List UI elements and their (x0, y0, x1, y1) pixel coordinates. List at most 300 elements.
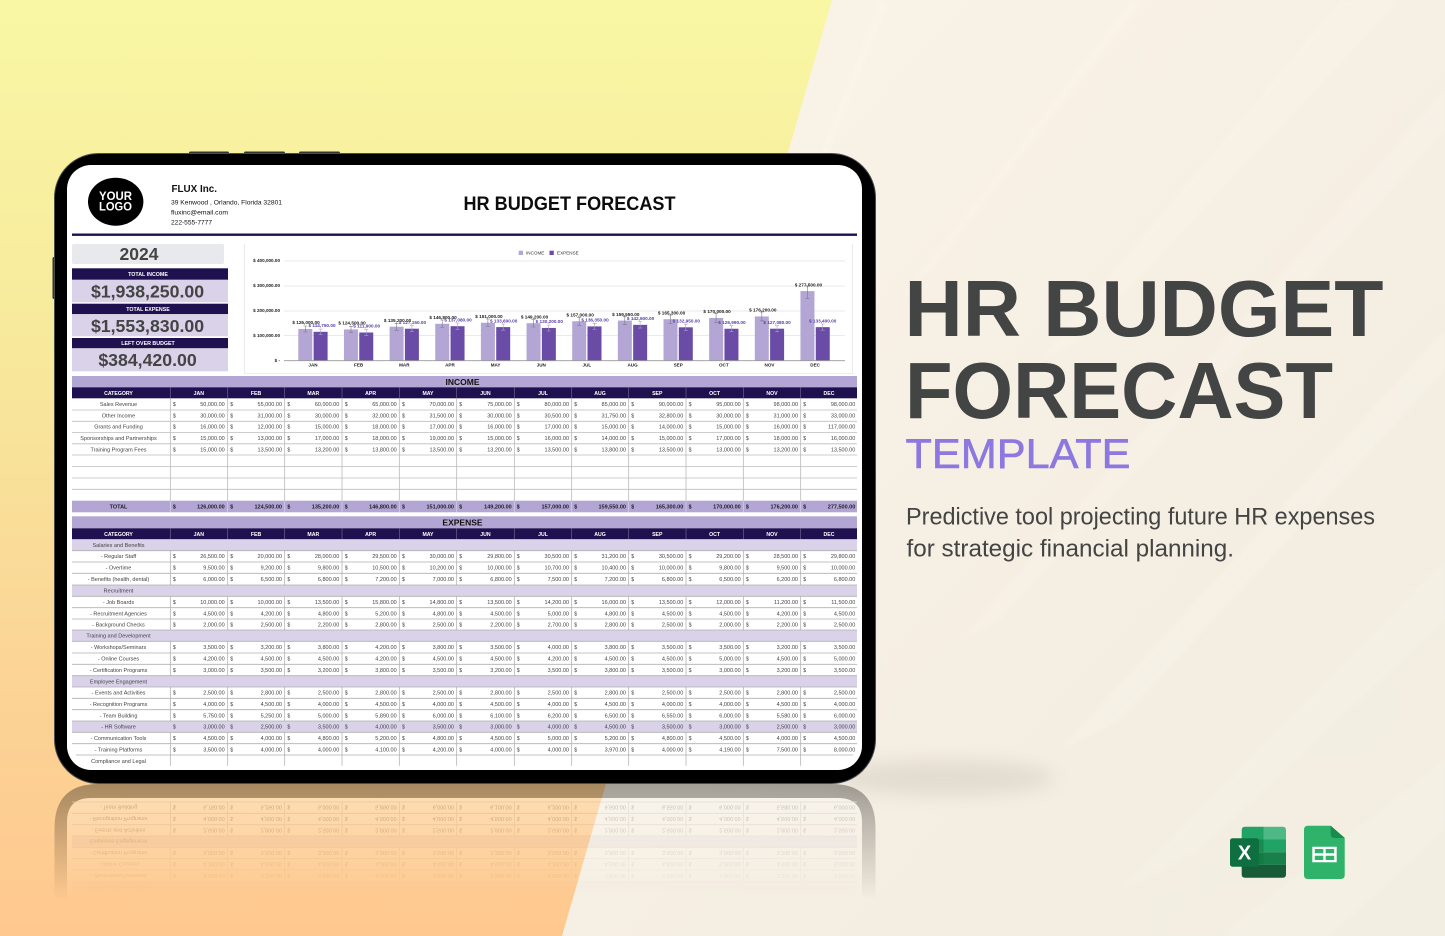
row: sales revenue: 55,000.00 (258, 402, 282, 408)
row: certification programs: 3,800.00 (375, 668, 397, 674)
month labels: SEP (674, 362, 683, 368)
row: overtime: 10,700.00 (545, 566, 569, 572)
row: job boards: 13,500.00 (315, 600, 339, 606)
expense header row: MAY (422, 532, 434, 538)
category: training and development: Training and Development (86, 634, 151, 640)
row: sponsorships and partnerships: 13,000.00 (258, 436, 282, 442)
income total row: 124,500.00 (254, 504, 282, 510)
legend: INCOME (526, 250, 544, 256)
row: sponsorships and partnerships: 15,000.00 (487, 436, 512, 442)
row: sponsorships and partnerships: 17,000.00 (716, 436, 741, 442)
row: recognition programs: 4,500.00 (605, 702, 626, 708)
row: benefits: 7,200.00 (605, 577, 626, 583)
row: events and activities: 2,500.00 (719, 691, 741, 697)
row: workshops and seminars: 3,500.00 (719, 645, 741, 651)
income value labels: $ 277,500.00 (795, 283, 822, 288)
row: sponsorships and partnerships: 18,000.00 (372, 436, 397, 442)
row: online courses: 5,000.00 (719, 657, 741, 663)
row: team building: 6,000.00 (433, 713, 454, 719)
month labels: APR (445, 362, 455, 368)
main heading (904, 264, 1384, 435)
row: events and activities: 2,800.00 (261, 691, 282, 697)
y axis labels: $ - (275, 358, 280, 363)
row: other income: 31,500.00 (430, 413, 454, 419)
row: background checks: 2,500.00 (662, 622, 683, 628)
income total row: TOTAL (110, 504, 128, 510)
description text (906, 503, 1375, 563)
row: recruitment agencies: 5,000.00 (548, 611, 569, 617)
row: events and activities: 2,800.00 (490, 691, 512, 697)
income value labels: $ 165,300.00 (658, 310, 686, 315)
income header row: OCT (709, 391, 721, 397)
icon: microsoft excel: X (1238, 842, 1252, 864)
expense header row: JUL (538, 532, 549, 538)
row: overtime: 10,400.00 (602, 566, 626, 572)
row: workshops and seminars: 3,500.00 (834, 645, 855, 651)
income bars (298, 291, 814, 360)
row: recruitment agencies: 4,500.00 (662, 611, 683, 617)
row: sales revenue: $$$$$$$$$$$$ (173, 402, 806, 408)
income value labels: $ 159,550.00 (612, 312, 640, 317)
row: certification programs: 3,500.00 (662, 668, 683, 674)
row: events and activities: 2,500.00 (433, 691, 454, 697)
expense header row: MAR (307, 532, 319, 538)
row: hr software: 3,500.00 (318, 725, 339, 731)
row: certification programs: 3,500.00 (433, 668, 454, 674)
legend (519, 250, 579, 256)
row: communication tools: 4,500.00 (490, 736, 512, 742)
row: workshops and seminars: 3,500.00 (203, 645, 225, 651)
income value labels: $ 124,500.00 (338, 321, 366, 326)
row: benefits: 6,800.00 (834, 577, 855, 583)
row: communication tools: 4,500.00 (203, 736, 225, 742)
expense value labels: $ 136,350.00 (581, 318, 609, 323)
row: benefits: 7,200.00 (375, 577, 397, 583)
row: events and activities: 2,800.00 (777, 691, 798, 697)
left over budget (72, 338, 228, 371)
row: benefits: 6,800.00 (662, 577, 683, 583)
row: overtime: - Overtime (106, 566, 131, 572)
expense header row: AUG (594, 532, 606, 538)
legend: EXPENSE (557, 250, 579, 256)
row: certification programs: 3,200.00 (490, 668, 512, 674)
y axis labels: $ 100,000.00 (253, 333, 280, 338)
row: training platforms: 4,000.00 (490, 747, 512, 753)
row: job boards: 11,200.00 (774, 600, 798, 606)
main heading: HR BUDGET (904, 264, 1384, 353)
row: events and activities: 2,500.00 (548, 691, 569, 697)
row: sponsorships and partnerships: 19,000.00 (430, 436, 454, 442)
row: grants and funding: 16,000.00 (200, 425, 225, 431)
month labels: AUG (627, 362, 638, 368)
expense value labels: $ 137,080.00 (444, 317, 472, 322)
income table (72, 376, 857, 512)
row: recognition programs: 4,500.00 (490, 702, 512, 708)
row: background checks: 2,700.00 (548, 622, 569, 628)
row: benefits: 6,500.00 (719, 577, 741, 583)
year: 2024 (120, 244, 159, 264)
row: recognition programs: 4,500.00 (777, 702, 798, 708)
y axis labels: $ 200,000.00 (253, 308, 280, 313)
subheading: template: TEMPLATE (906, 430, 1130, 477)
row: grants and funding: 117,000.00 (828, 425, 855, 431)
row: recognition programs: 4,000.00 (834, 702, 855, 708)
description text: for strategic financial planning. (906, 536, 1234, 563)
row: hr software: 4,000.00 (375, 725, 397, 731)
row: team building: 5,250.00 (261, 713, 282, 719)
row: online courses: 4,500.00 (490, 657, 512, 663)
row: recognition programs: $$$$$$$$$$$$ (173, 702, 806, 708)
row: training program fees: $$$$$$$$$$$$ (173, 447, 806, 453)
income value labels (292, 283, 822, 326)
company details: fluxinc@email.com (171, 210, 228, 217)
row: training program fees: 13,500.00 (659, 447, 683, 453)
row: training platforms: 4,000.00 (548, 747, 569, 753)
row: team building: $$$$$$$$$$$$ (173, 713, 806, 719)
row: online courses: 4,500.00 (318, 657, 339, 663)
row: regular staff: 26,500.00 (200, 554, 225, 560)
row: sponsorships and partnerships: 18,000.00 (774, 436, 798, 442)
expense value labels: $ 114,750.00 (308, 323, 336, 328)
expense value labels: $ 132,950.00 (673, 318, 700, 324)
expense header row: APR (365, 532, 376, 538)
expense header row: JAN (194, 532, 204, 538)
income value labels: $ 170,000.00 (703, 309, 731, 314)
expense value labels: $ 133,600.00 (490, 318, 518, 323)
row: job boards: 10,000.00 (258, 600, 282, 606)
row: benefits: 7,000.00 (433, 577, 454, 583)
row: training platforms: 3,500.00 (203, 747, 225, 753)
row: events and activities: 2,500.00 (318, 691, 339, 697)
row: overtime: 9,800.00 (318, 566, 339, 572)
row: sponsorships and partnerships: 16,000.00 (831, 436, 855, 442)
row: recruitment agencies: 4,800.00 (318, 611, 339, 617)
row: regular staff: 29,500.00 (372, 554, 397, 560)
expense header row: CATEGORY (104, 532, 133, 538)
row: other income: 30,000.00 (200, 413, 225, 419)
row: online courses: 4,200.00 (375, 657, 397, 663)
row: background checks: 2,000.00 (203, 622, 225, 628)
row: recognition programs: - Recognition Programs (90, 702, 148, 708)
row: benefits: 6,500.00 (261, 577, 282, 583)
row: team building: 6,500.00 (605, 713, 626, 719)
row: benefits: 6,800.00 (490, 577, 512, 583)
row: training platforms: 7,500.00 (777, 747, 798, 753)
row: grants and funding: 12,000.00 (258, 425, 282, 431)
expense table (72, 516, 857, 766)
row: overtime: $$$$$$$$$$$$ (173, 566, 806, 572)
row: training platforms: 4,100.00 (375, 747, 397, 753)
panel: yearly summary (72, 244, 228, 371)
row: benefits: 7,500.00 (548, 577, 569, 583)
row: overtime: 10,500.00 (372, 566, 397, 572)
row: overtime: 9,800.00 (719, 566, 741, 572)
row: other income: 31,750.00 (602, 413, 626, 419)
row: recruitment agencies: 4,800.00 (433, 611, 454, 617)
row: sales revenue: 80,000.00 (545, 402, 569, 408)
income total row: 149,200.00 (484, 504, 512, 510)
expense value labels: $ 142,600.00 (627, 316, 655, 321)
row: regular staff: 30,500.00 (659, 554, 683, 560)
row: training program fees: 13,200.00 (774, 447, 798, 453)
income header row: JUN (480, 391, 491, 397)
row: grants and funding: 15,000.00 (602, 425, 626, 431)
row: recognition programs: 4,000.00 (662, 702, 683, 708)
company details (171, 184, 283, 227)
row: certification programs: 3,500.00 (834, 668, 855, 674)
row: overtime: 10,000.00 (831, 566, 855, 572)
tablet shadow (835, 760, 1055, 796)
row: sponsorships and partnerships: 15,000.00 (200, 436, 225, 442)
income total row: 176,200.00 (770, 504, 798, 510)
icon: your logo: YOUR (99, 191, 133, 203)
income header row: APR (365, 391, 376, 397)
company details: FLUX Inc. (172, 184, 217, 195)
row: background checks: 2,800.00 (375, 622, 397, 628)
row: training program fees: 13,500.00 (545, 447, 569, 453)
row: sponsorships and partnerships: 14,000.00 (602, 436, 626, 442)
row: training platforms: 4,000.00 (662, 747, 683, 753)
row: background checks: 2,500.00 (834, 622, 855, 628)
row: events and activities: 2,500.00 (834, 691, 855, 697)
income total row: 135,200.00 (312, 504, 339, 510)
row: regular staff: 29,200.00 (716, 554, 741, 560)
background: cream diagonal panel (562, 0, 1445, 936)
row: hr software: 3,000.00 (834, 725, 855, 731)
category: compliance and legal: Compliance and Legal (91, 759, 146, 765)
row: certification programs: 3,200.00 (777, 668, 798, 674)
month labels: MAY (491, 362, 500, 368)
row: certification programs: 3,500.00 (261, 668, 282, 674)
row: grants and funding: 17,000.00 (430, 425, 454, 431)
row: background checks: $$$$$$$$$$$$ (173, 622, 806, 628)
row: hr software: 4,500.00 (605, 725, 626, 731)
row: job boards: 10,000.00 (200, 600, 225, 606)
income total row: 165,300.00 (656, 504, 683, 510)
row: training program fees: 13,000.00 (716, 447, 741, 453)
income header row: AUG (594, 391, 606, 397)
row: sales revenue: 70,000.00 (430, 402, 454, 408)
left over budget: $384,420.00 (98, 350, 197, 370)
month labels: FEB (354, 362, 364, 368)
row: training platforms: 4,200.00 (433, 747, 454, 753)
row: sales revenue: 98,000.00 (774, 402, 798, 408)
row: team building: 5,000.00 (318, 713, 339, 719)
month labels: JUN (537, 362, 547, 368)
row: grants and funding: Grants and Funding (94, 425, 143, 431)
row: online courses: $$$$$$$$$$$$ (173, 657, 806, 663)
row: overtime: 9,500.00 (777, 566, 798, 572)
row: team building: 6,000.00 (719, 713, 741, 719)
row: job boards: 14,200.00 (545, 600, 569, 606)
income header row: NOV (766, 391, 778, 397)
income total row: 277,500.00 (828, 504, 855, 510)
row: job boards: 13,500.00 (659, 600, 683, 606)
error bars (303, 286, 825, 335)
row: regular staff: 28,000.00 (315, 554, 339, 560)
income header row: DEC (824, 391, 835, 397)
row: background checks: 2,000.00 (719, 622, 741, 628)
row: regular staff: - Regular Staff (101, 554, 137, 560)
company details: 222-555-7777 (171, 220, 213, 227)
zero axis (284, 360, 845, 362)
row: hr software: 3,000.00 (490, 725, 512, 731)
row: recruitment agencies: 4,200.00 (777, 611, 798, 617)
expense header row: FEB (251, 532, 261, 538)
icon: microsoft excel (1230, 827, 1286, 878)
income section heading (72, 376, 857, 387)
row: job boards: 16,000.00 (602, 600, 626, 606)
row: sponsorships and partnerships: Sponsorships and Partnerships (80, 436, 157, 442)
row: recognition programs: 4,000.00 (548, 702, 569, 708)
row: sponsorships and partnerships: 16,000.00 (545, 436, 569, 442)
total expense: $1,553,830.00 (91, 316, 204, 336)
row: background checks: 2,800.00 (605, 622, 626, 628)
row: communication tools: 4,800.00 (433, 736, 454, 742)
row: online courses: 4,200.00 (203, 657, 225, 663)
row: job boards: 12,000.00 (716, 600, 741, 606)
row: online courses: 4,200.00 (548, 657, 569, 663)
row: recruitment agencies: 4,800.00 (605, 611, 626, 617)
row: team building: 6,550.00 (662, 713, 683, 719)
row: workshops and seminars: 3,200.00 (777, 645, 798, 651)
icon: google sheets (1304, 826, 1345, 879)
income header row (72, 387, 857, 398)
income header row: CATEGORY (104, 391, 133, 397)
income total row: 159,550.00 (598, 504, 626, 510)
total income: TOTAL INCOME (128, 272, 168, 278)
row: online courses: 4,500.00 (777, 657, 798, 663)
row: recognition programs: 4,000.00 (433, 702, 454, 708)
income total row: 151,000.00 (426, 504, 454, 510)
row: background checks: 2,200.00 (777, 622, 798, 628)
main heading: FORECAST (905, 346, 1333, 435)
row: hr software: - HR Software (101, 725, 136, 731)
row: recruitment agencies: 4,200.00 (261, 611, 282, 617)
row: training platforms: $$$$$$$$$$$$ (173, 747, 806, 753)
row: training program fees: 13,200.00 (315, 447, 339, 453)
income value labels: $ 176,200.00 (749, 308, 777, 313)
expense value labels (308, 316, 837, 329)
income value labels: $ 146,800.00 (429, 315, 457, 320)
month labels (308, 362, 821, 368)
row: hr software: $$$$$$$$$$$$ (173, 725, 806, 731)
row: hr software: 4,000.00 (548, 725, 569, 731)
expense value labels: $ 126,990.00 (718, 320, 746, 325)
income total row: 157,000.00 (541, 504, 569, 510)
y axis labels: $ 300,000.00 (253, 283, 280, 288)
tablet reflection (54, 784, 876, 888)
row: training program fees: 13,800.00 (602, 447, 626, 453)
row: other income: 30,000.00 (487, 413, 512, 419)
month labels: DEC (810, 362, 821, 368)
row: certification programs: 3,800.00 (605, 668, 626, 674)
description text: Predictive tool projecting future HR expenses (906, 503, 1375, 530)
row: workshops and seminars: 3,800.00 (318, 645, 339, 651)
row: regular staff: 31,200.00 (602, 554, 626, 560)
row: communication tools: 4,500.00 (719, 736, 741, 742)
row: recognition programs: 4,000.00 (203, 702, 225, 708)
category: employee engagement: Employee Engagement (90, 679, 148, 685)
row: job boards: 14,800.00 (430, 600, 454, 606)
row: communication tools: 4,800.00 (318, 736, 339, 742)
row: communication tools: 4,000.00 (261, 736, 282, 742)
row: training program fees: 13,500.00 (430, 447, 454, 453)
row: hr software: 2,500.00 (777, 725, 798, 731)
sheet title: HR BUDGET FORECAST (464, 193, 676, 215)
expense value labels: $ 111,900.00 (353, 324, 381, 329)
row: training platforms: 3,970.00 (605, 747, 626, 753)
row: communication tools: 5,000.00 (548, 736, 569, 742)
month labels: MAR (399, 362, 410, 368)
row: grants and funding: 16,000.00 (774, 425, 798, 431)
company details: 39 Kenwood , Orlando, Florida 32801 (171, 200, 283, 207)
row: regular staff: 30,500.00 (545, 554, 569, 560)
row: background checks: 2,500.00 (433, 622, 454, 628)
tablet body and screen (52, 152, 876, 784)
row: communication tools: 5,200.00 (605, 736, 626, 742)
total expense: TOTAL EXPENSE (126, 307, 170, 313)
row: sponsorships and partnerships: $$$$$$$$$$$$ (173, 436, 806, 442)
row: recognition programs: 4,500.00 (261, 702, 282, 708)
total expense (72, 304, 228, 336)
row: other income: 30,500.00 (545, 413, 569, 419)
row: training program fees: 13,500.00 (831, 447, 855, 453)
row: recruitment agencies: - Recruitment Agencies (90, 611, 147, 617)
income header row: SEP (652, 391, 663, 397)
row: regular staff: 30,000.00 (430, 554, 454, 560)
row: team building: 6,200.00 (548, 713, 569, 719)
category: salaries and benefits: Salaries and Benefits (93, 543, 145, 549)
row: online courses: 4,500.00 (662, 657, 683, 663)
row: training program fees: 15,000.00 (200, 447, 225, 453)
row: certification programs: 3,200.00 (318, 668, 339, 674)
row: overtime: 10,000.00 (487, 566, 512, 572)
row: overtime: 10,000.00 (659, 566, 683, 572)
row: team building: 5,750.00 (203, 713, 225, 719)
row: certification programs: $$$$$$$$$$$$ (173, 668, 806, 674)
row: regular staff: 28,500.00 (774, 554, 798, 560)
row: other income: 31,000.00 (774, 413, 798, 419)
row: workshops and seminars: 3,800.00 (605, 645, 626, 651)
income total row (72, 501, 857, 512)
row: events and activities: 2,500.00 (203, 691, 225, 697)
y axis labels (253, 258, 280, 363)
expense value labels: $ 130,200.00 (536, 319, 563, 324)
row: team building: 6,000.00 (834, 713, 855, 719)
row: hr software: 3,500.00 (662, 725, 683, 731)
row: recruitment agencies: 4,500.00 (490, 611, 512, 617)
row: training program fees: 13,800.00 (372, 447, 397, 453)
row: communication tools: 5,200.00 (375, 736, 397, 742)
row: communication tools: $$$$$$$$$$$$ (173, 736, 806, 742)
row: communication tools: 4,500.00 (834, 736, 855, 742)
y axis labels: $ 400,000.00 (253, 258, 280, 263)
row: hr software: 3,000.00 (203, 725, 225, 731)
month labels: JUL (583, 362, 591, 368)
row: grants and funding: 14,000.00 (659, 425, 683, 431)
row: recruitment agencies: 5,200.00 (375, 611, 397, 617)
expense section heading (72, 516, 857, 528)
expense header row: JUN (480, 532, 491, 538)
row: regular staff: 20,000.00 (258, 554, 282, 560)
row: other income: 32,000.00 (372, 413, 397, 419)
expense section heading: EXPENSE (442, 518, 483, 528)
expense value labels: $ 133,400.00 (809, 318, 837, 323)
company header (88, 178, 676, 227)
row: recognition programs: 4,500.00 (375, 702, 397, 708)
expense rows from background checks to team building (72, 621, 857, 721)
